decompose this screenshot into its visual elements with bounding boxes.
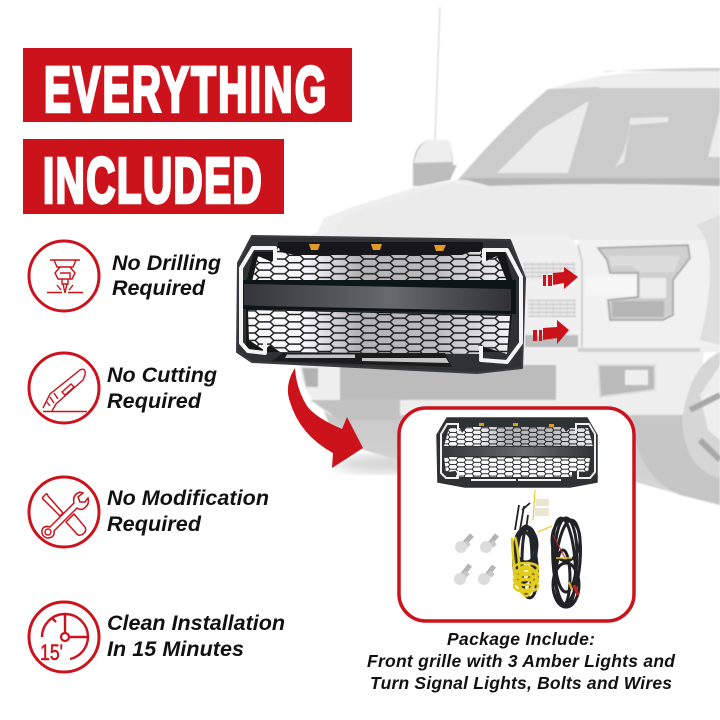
text: No Modification Required: No Modification xyxy=(107,486,269,510)
text: package caption xyxy=(367,629,675,693)
text: Clean Installation In 15 Minutes: In 15 Minutes xyxy=(107,637,244,661)
panel: package contents xyxy=(399,408,634,621)
title banner: EVERYTHING: EVERYTHING xyxy=(44,55,326,126)
text: No Drilling Required: No Drilling xyxy=(112,251,221,275)
lower light bar xyxy=(272,353,452,367)
text: Clean Installation In 15 Minutes: Clean Installation xyxy=(107,611,285,635)
text: No Drilling Required: Required xyxy=(112,276,206,300)
icon: cutting knife xyxy=(29,353,99,423)
arrow: red pointer to grille top xyxy=(543,267,578,289)
truck photo, faded xyxy=(300,7,720,505)
centre bar xyxy=(243,280,516,314)
text: package caption: Turn Signal Lights, Bolts and Wires xyxy=(370,673,672,693)
product: front grille xyxy=(237,236,525,373)
title banner: INCLUDED: INCLUDED xyxy=(43,146,262,217)
icon: clock 15 minutes: 15' xyxy=(40,640,63,665)
white turn signal frames xyxy=(241,248,521,362)
upper mesh xyxy=(246,242,513,283)
text: package caption: Front grille with 3 Amber Lights and xyxy=(367,651,675,671)
text: No Cutting Required: No Cutting xyxy=(107,363,217,387)
arrow: large curved arrow xyxy=(288,368,363,468)
bolts xyxy=(454,535,497,585)
icon: clock 15 minutes xyxy=(29,602,99,672)
text: No Cutting Required: Required xyxy=(107,389,202,413)
text: package caption: Package Include: xyxy=(447,629,595,649)
icon: drilling xyxy=(29,241,99,311)
inset grille xyxy=(437,418,597,487)
amber lights xyxy=(309,244,446,251)
text: No Modification Required: Required xyxy=(107,512,202,536)
icon: wrench and screwdriver xyxy=(29,477,99,547)
wiring harness xyxy=(511,490,584,607)
lower mesh xyxy=(246,309,512,354)
arrow: red pointer to grille bottom xyxy=(533,320,569,344)
